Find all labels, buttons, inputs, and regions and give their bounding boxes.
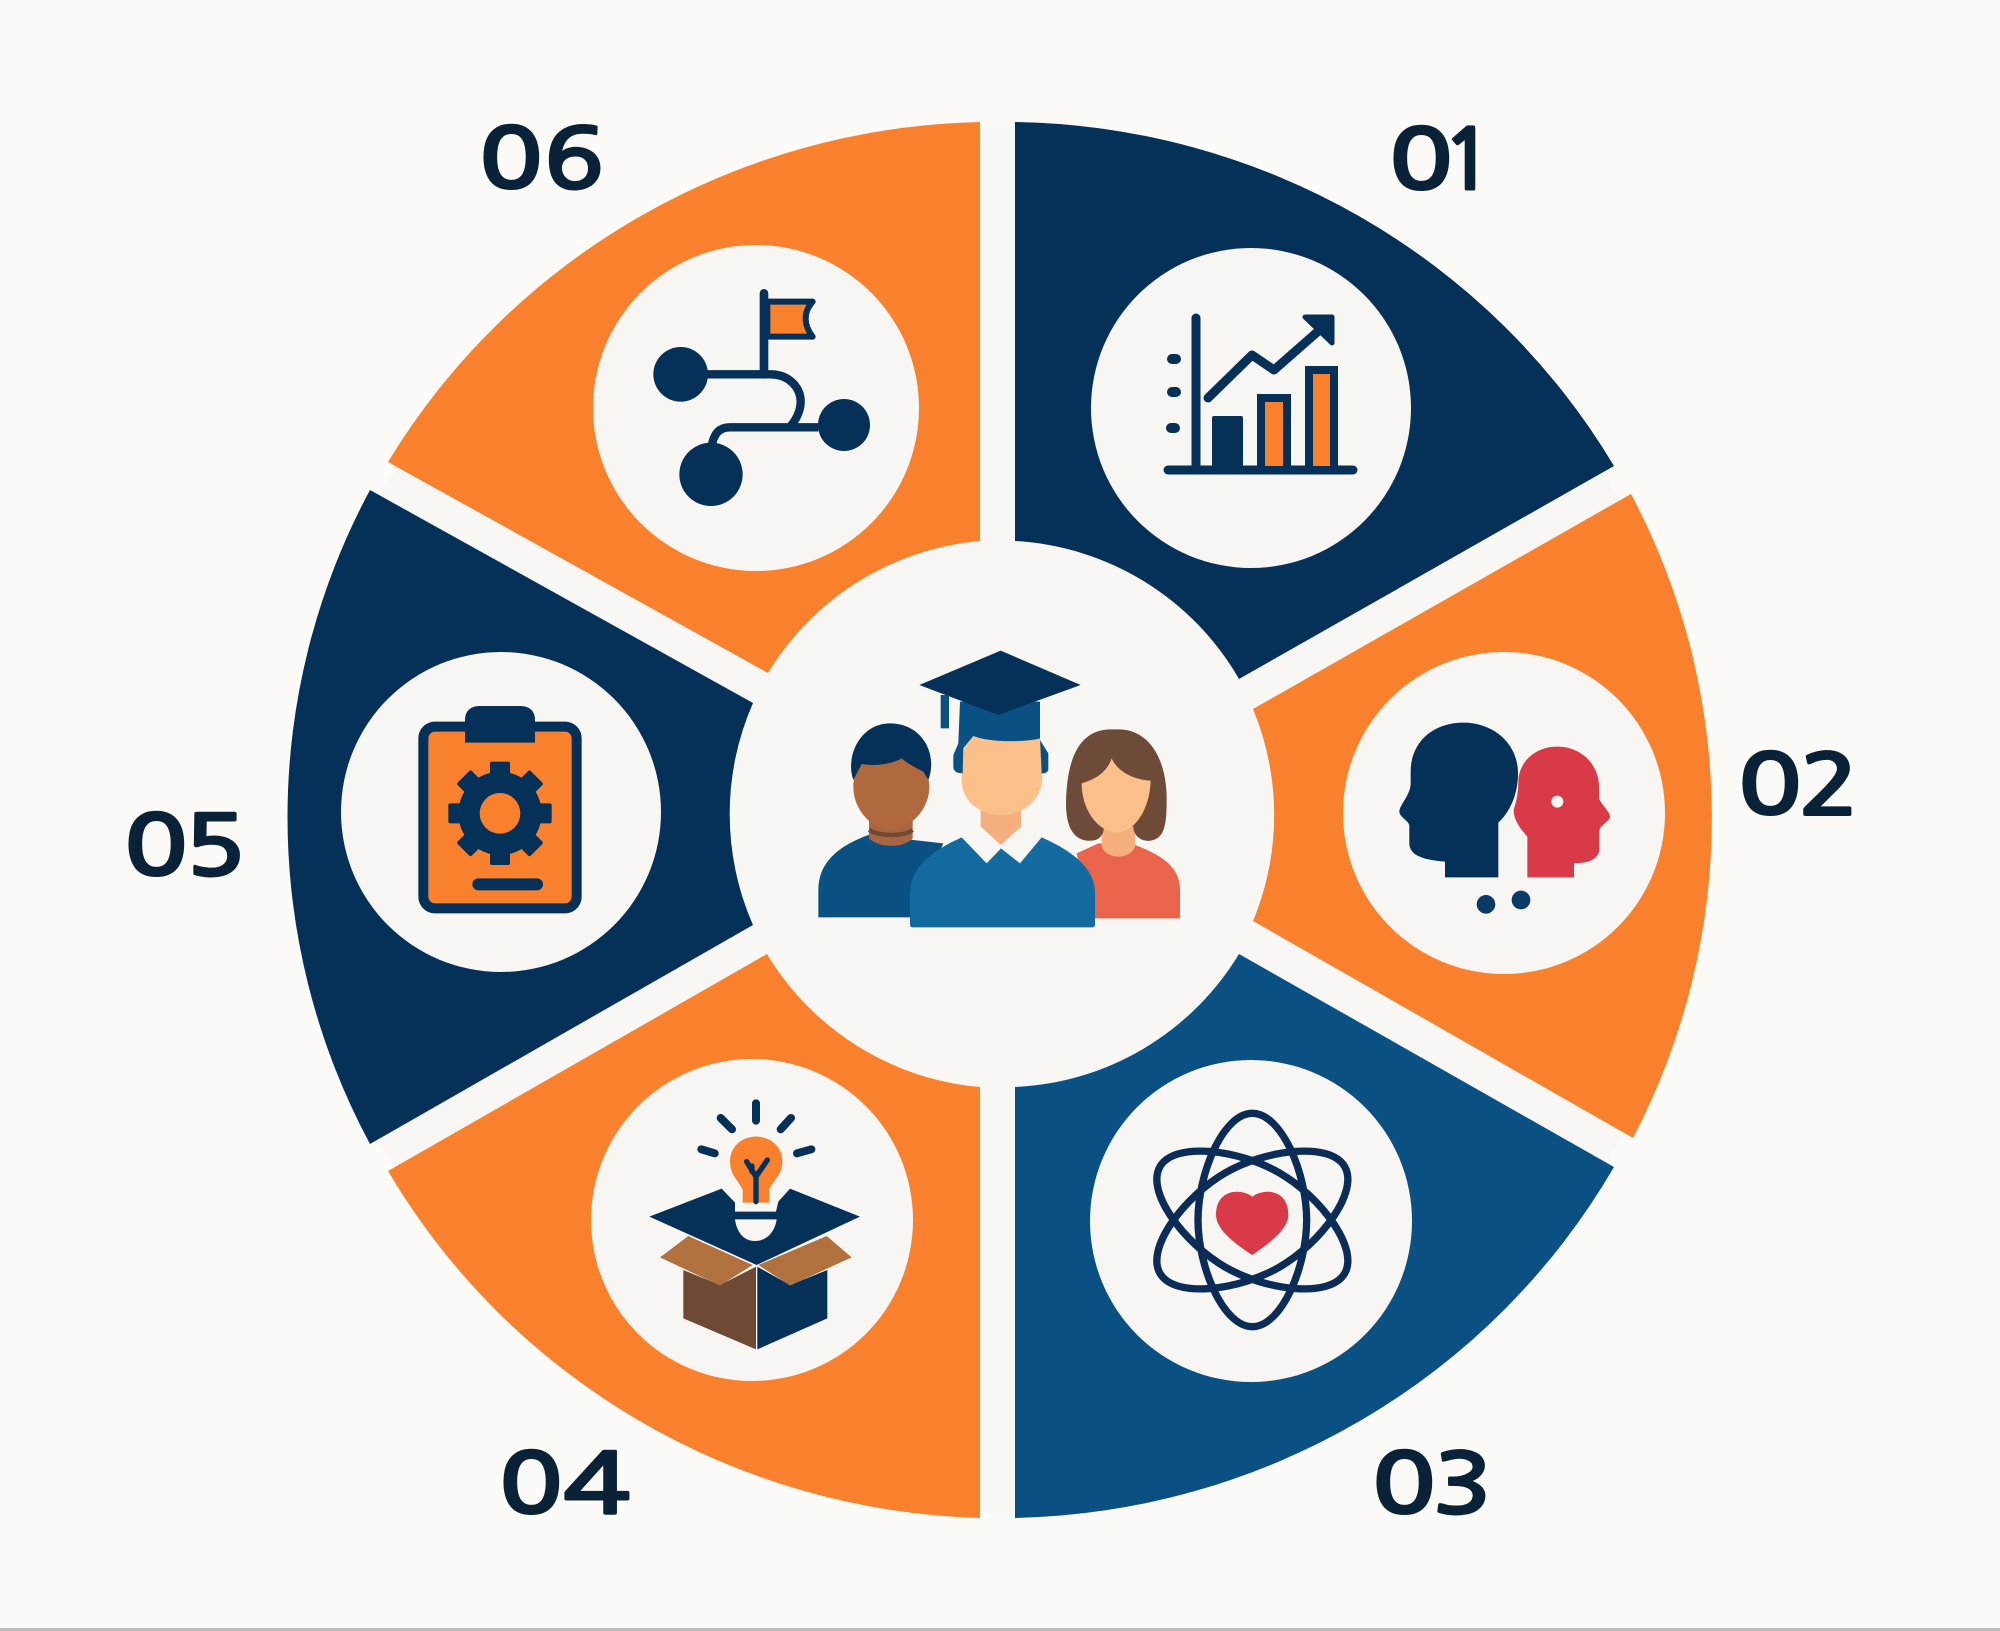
right person [1066, 729, 1180, 918]
icon: clipboard with gear [423, 706, 577, 908]
number 01: 0 [1388, 119, 1454, 203]
number 03 [1371, 1443, 1493, 1527]
segment 03 [1015, 954, 1614, 1518]
number 01 [1388, 119, 1495, 203]
segment 01 [1015, 122, 1614, 679]
segment 04 [388, 954, 980, 1518]
segment 06 [388, 122, 980, 673]
icon: route with flag [653, 293, 870, 506]
segment 02 [1253, 494, 1712, 1138]
icon circle 06 [593, 245, 919, 571]
left person [818, 723, 943, 917]
number 05 [123, 805, 246, 889]
icon: box with lightbulb [649, 1103, 860, 1349]
icon circle 05 [341, 652, 661, 972]
number 02 [1737, 744, 1860, 828]
wheel base with centre hub [299, 128, 1699, 1512]
icon circle 01 [1091, 248, 1411, 568]
number 04: 4 [562, 1443, 632, 1527]
icon circle 03 [1090, 1060, 1412, 1382]
number 05: 0 [123, 805, 189, 889]
number 05: 5 [184, 805, 246, 889]
icon: atom with heart [1133, 1113, 1372, 1327]
number 02: 2 [1798, 744, 1860, 828]
number 03: 0 [1371, 1443, 1437, 1527]
centre person with cap [910, 651, 1095, 927]
icon circle 02 [1343, 652, 1665, 974]
number 01: 1 [1441, 119, 1495, 203]
number 04 [498, 1443, 632, 1527]
number 06: 0 [478, 118, 544, 202]
segment 05 [287, 490, 753, 1144]
icon circle 04 [591, 1059, 913, 1381]
icon: growth chart [1166, 317, 1353, 470]
number 06: 6 [543, 118, 605, 202]
centre icon: graduate group [818, 651, 1180, 927]
icon: two heads [1399, 723, 1610, 914]
number 03: 3 [1432, 1443, 1493, 1527]
number 02: 0 [1737, 744, 1803, 828]
number 06 [478, 118, 605, 202]
number 04: 0 [498, 1443, 564, 1527]
